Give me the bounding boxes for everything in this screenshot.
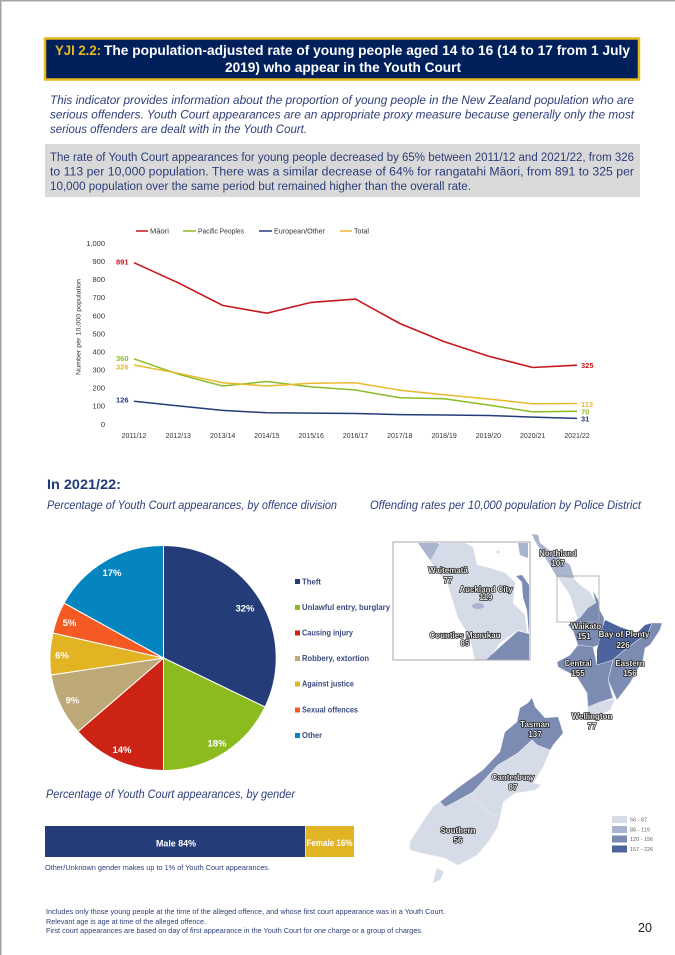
- summary panel: [45, 144, 640, 197]
- map legend: 157 - 226: [630, 847, 653, 853]
- data labels: 891: [116, 258, 129, 266]
- pie legend: Robbery, extortion: [302, 654, 369, 663]
- y axis: 200: [92, 384, 105, 392]
- district labels: Eastern: [615, 659, 645, 668]
- district labels: Waikato: [571, 622, 601, 631]
- data labels: [116, 258, 594, 424]
- data labels: 360: [116, 354, 129, 363]
- district labels: 56: [454, 836, 463, 845]
- series: European/Other: [134, 401, 577, 418]
- x axis: 2011/12: [122, 433, 146, 440]
- y axis: 1,000: [86, 239, 105, 248]
- district labels: 226: [616, 641, 630, 650]
- district labels: Bay of Plenty: [599, 630, 650, 639]
- title banner: [45, 38, 639, 80]
- district labels: 85: [461, 639, 470, 648]
- series: Total: [134, 365, 577, 404]
- pie legend: Theft: [302, 578, 321, 586]
- x axis: 2018/19: [431, 433, 457, 440]
- intro text: serious offenders are dealt with in the Youth Court.: [50, 124, 307, 136]
- y axis title: Number per 10,000 population: [76, 279, 82, 375]
- pie chart: 6%: [55, 650, 69, 662]
- map legend: 120 - 156: [630, 837, 653, 843]
- pie chart: 17%: [102, 568, 122, 579]
- district labels: 119: [480, 593, 493, 602]
- x axis: [122, 433, 590, 440]
- district labels: Wellington: [572, 712, 612, 721]
- data labels: 113: [581, 400, 593, 409]
- pie legend: Sexual offences: [302, 706, 358, 714]
- district labels: Central: [564, 659, 592, 668]
- y axis: 100: [92, 402, 105, 410]
- district labels: Tasman: [520, 720, 550, 729]
- y axis: 800: [92, 275, 105, 284]
- district labels: 87: [509, 783, 518, 792]
- pie legend: [295, 578, 391, 740]
- pie legend: Against justice: [302, 680, 354, 688]
- district labels: Canterbury: [492, 773, 535, 782]
- intro text: [50, 95, 635, 136]
- data labels: 31: [581, 414, 589, 424]
- line chart: [76, 228, 594, 440]
- inset locator box: [557, 576, 599, 622]
- chart legend: Pacific Peoples: [198, 228, 244, 236]
- district labels: Counties Manukau: [429, 631, 501, 640]
- district labels: 156: [623, 669, 637, 678]
- South Island: [410, 698, 563, 883]
- footnotes: [46, 907, 445, 935]
- pie chart: 14%: [112, 745, 132, 756]
- chart legend: Māori: [150, 228, 169, 236]
- district labels: Waitematā: [428, 566, 468, 575]
- map: New Zealand police districts: [393, 534, 662, 883]
- district labels: Auckland City: [459, 585, 513, 594]
- district labels: [428, 549, 650, 845]
- x axis: 2017/18: [387, 433, 413, 440]
- y axis: 600: [92, 312, 105, 320]
- gender bar: Female 16%: [306, 838, 352, 848]
- summary panel: The rate of Youth Court appearances for young people decreased by 65% between 2011/12 and 2021/22, from 326: [50, 152, 634, 164]
- y axis: 500: [92, 330, 105, 338]
- x axis: 2015/16: [299, 433, 324, 440]
- data labels: 325: [581, 361, 594, 370]
- section heading: In 2021/22:: [47, 476, 121, 492]
- page number: 20: [638, 920, 652, 935]
- gender bar: Male 84%: [156, 838, 196, 848]
- intro text: serious offenders. Youth Court appearances are an appropriate proxy measure because generally only the most: [50, 110, 635, 122]
- footnotes: First court appearances are based on day of first appearance in the Youth Court for one charge or a group of charges.: [46, 926, 423, 935]
- y axis: 300: [92, 366, 105, 374]
- y axis: 0: [101, 420, 105, 429]
- title banner: The population-adjusted rate of young people aged 14 to 16 (14 to 17 from 1 July: [104, 43, 630, 58]
- subheading: gender: Percentage of Youth Court appearances, by gender: [46, 789, 296, 801]
- district labels: Southern: [440, 826, 476, 835]
- data labels: 70: [581, 408, 589, 416]
- chart legend: European/Other: [274, 228, 326, 236]
- x axis: 2012/13: [166, 433, 191, 440]
- pie legend: Causing injury: [302, 628, 354, 638]
- district labels: 155: [571, 669, 585, 678]
- title banner: 2019) who appear in the Youth Court: [225, 60, 462, 75]
- data labels: 126: [116, 396, 129, 404]
- pie chart: 5%: [63, 618, 77, 629]
- x axis: 2021/22: [564, 433, 590, 440]
- chart legend: Total: [354, 228, 369, 236]
- y axis: [86, 239, 105, 429]
- subheading: police district: Offending rates per 10,000 population by Police District: [370, 500, 642, 512]
- y axis: 700: [92, 293, 105, 302]
- gender bar: [45, 826, 354, 857]
- pie chart: 9%: [66, 696, 80, 706]
- footnotes: Includes only those young people at the time of the alleged offence, and whose first court appearance was in a Youth Court.: [46, 907, 445, 916]
- chart legend: [136, 228, 369, 236]
- data labels: 326: [116, 362, 129, 372]
- y axis: 400: [92, 348, 105, 356]
- pie legend: Other: [302, 731, 322, 740]
- district labels: 107: [551, 559, 565, 568]
- district labels: 151: [577, 632, 591, 641]
- intro text: This indicator provides information about the proportion of young people in the New Zealand population who are: [50, 95, 634, 107]
- district labels: Northland: [539, 549, 577, 558]
- series: Pacific Peoples: [134, 359, 577, 412]
- district labels: 77: [588, 722, 597, 731]
- gender note: Other/Unknown gender makes up to 1% of Youth Court appearances.: [45, 863, 270, 872]
- map legend: 56 - 87: [630, 818, 647, 824]
- pie chart: 32%: [235, 604, 255, 614]
- x axis: 2014/15: [254, 433, 280, 440]
- x axis: 2013/14: [210, 433, 235, 440]
- y axis: 900: [92, 257, 105, 266]
- map legend: 88 - 119: [630, 828, 650, 834]
- summary panel: to 113 per 10,000 population. There was a similar decrease of 64% for rangatahi Māori, from 891 to 325 per: [50, 166, 634, 178]
- x axis: 2019/20: [476, 433, 501, 440]
- title banner: YJI 2.2:: [55, 43, 101, 58]
- district labels: 137: [528, 730, 542, 739]
- subheading: offence division: Percentage of Youth Court appearances, by offence division: [47, 500, 337, 512]
- map legend: [612, 816, 653, 853]
- pie chart: 18%: [207, 738, 227, 750]
- North Island: [532, 534, 662, 717]
- summary panel: 10,000 population over the same period but remained higher than the overall rate.: [50, 181, 471, 193]
- district labels: 77: [444, 576, 453, 585]
- inset box: [393, 542, 530, 660]
- pie chart: [50, 545, 276, 771]
- pie legend: Unlawful entry, burglary: [302, 603, 391, 612]
- series: Māori: [134, 263, 577, 368]
- x axis: 2016/17: [343, 433, 368, 440]
- x axis: 2020/21: [520, 433, 545, 440]
- footnotes: Relevant age is age at time of the alleged offence.: [46, 917, 206, 926]
